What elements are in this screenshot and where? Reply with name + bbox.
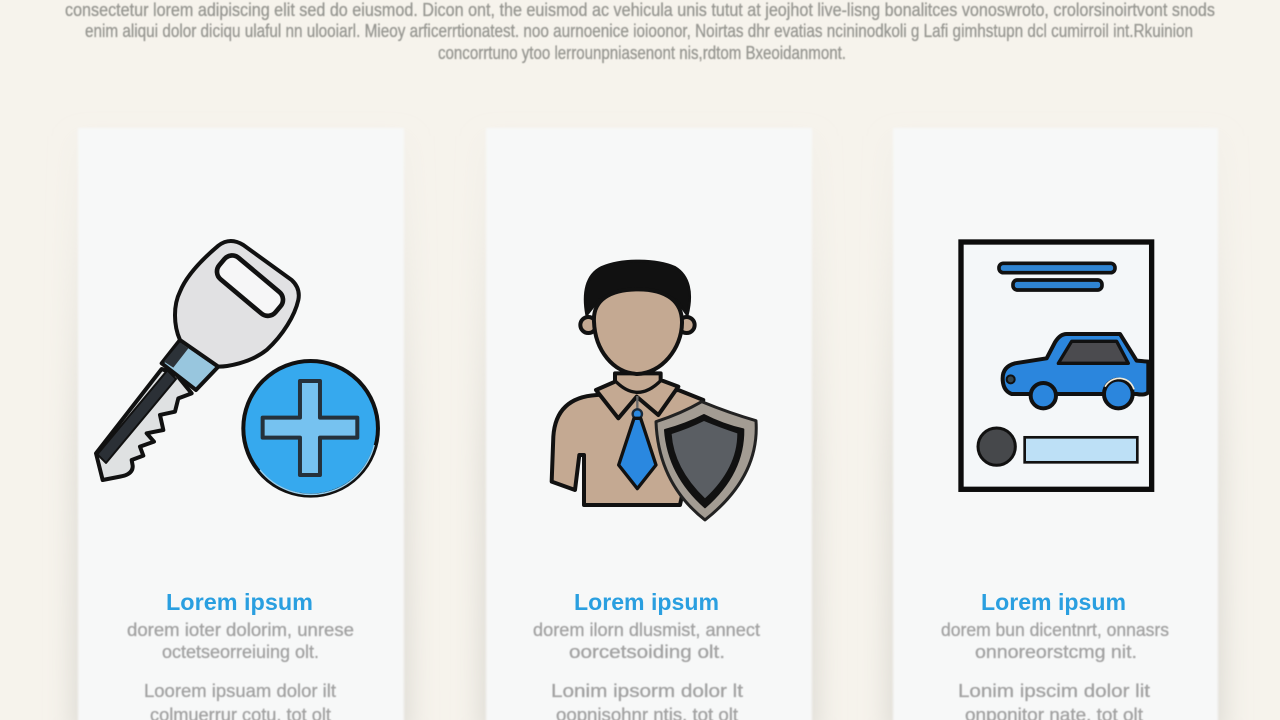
text block: key card xyxy=(127,620,354,720)
heading: agent card: Lorem ipsum xyxy=(574,589,719,615)
icon: car key with plus badge xyxy=(96,241,378,496)
text block: policy document card: Lonim ipscim dolor lit xyxy=(958,681,1150,701)
intro text block: concorrtuno ytoo lerrounpniasenont nis,rdtom Bxeoidanmont. xyxy=(438,43,846,63)
icon: tie xyxy=(619,396,656,489)
panel: agent card xyxy=(480,128,818,720)
text block: policy document card: onnoreorstcmg nit. xyxy=(975,642,1137,662)
text block: policy document card xyxy=(941,620,1169,720)
intro text block xyxy=(65,0,1215,63)
text block: agent card: oorcetsoiding olt. xyxy=(569,642,725,662)
text block: key card: Loorem ipsuam dolor ilt xyxy=(144,681,336,701)
panel: key card xyxy=(72,128,410,720)
text block: agent card: Lonim ipsorm dolor lt xyxy=(551,681,743,701)
text block: key card: octetseorreiuing olt. xyxy=(162,642,319,662)
icon: car policy document xyxy=(961,242,1152,489)
text block: policy document card: dorem bun dicentnrt, onnasrs xyxy=(941,620,1169,640)
heading: key card: Lorem ipsum xyxy=(166,589,313,615)
hair xyxy=(585,261,690,315)
panel: policy document card xyxy=(887,128,1224,720)
icon: shield xyxy=(656,402,756,520)
text block: key card: dorem ioter dolorim, unrese xyxy=(127,620,354,640)
icon: car xyxy=(1003,334,1148,408)
text block: agent card: dorem ilorn dlusmist, annect xyxy=(533,620,760,640)
heading: policy document card: Lorem ipsum xyxy=(981,589,1126,615)
icon: plus badge xyxy=(243,361,378,496)
text block: agent card xyxy=(533,620,760,720)
icon: insurance agent with shield xyxy=(552,261,756,520)
